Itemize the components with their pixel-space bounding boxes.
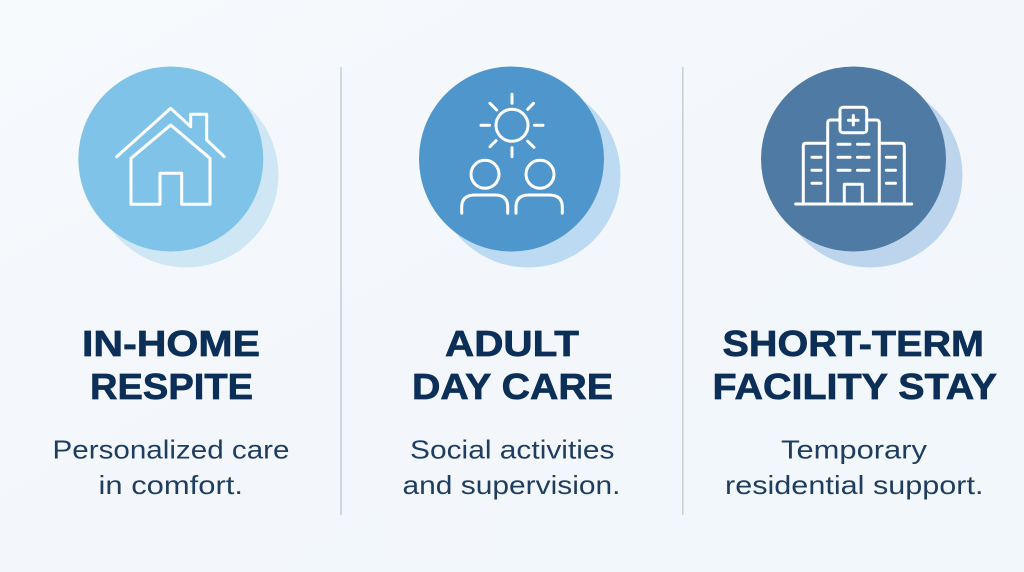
panel: in-home respite <box>52 66 290 500</box>
heading: adult day care: ADULT <box>445 323 579 364</box>
heading: short-term facility stay: SHORT-TERM <box>722 323 984 364</box>
icon: sun and two people in blue circle <box>419 66 620 268</box>
heading: short-term facility stay: FACILITY STAY <box>712 366 997 407</box>
text: adult day care description: Social activities <box>410 435 614 465</box>
heading: in-home respite: IN-HOME <box>82 323 260 364</box>
text: facility stay description: residential support. <box>725 470 984 500</box>
heading: in-home respite <box>82 323 260 407</box>
text: facility stay description <box>725 435 984 500</box>
panel: adult day care <box>402 66 620 500</box>
text: in-home description: in comfort. <box>98 470 243 500</box>
text: in-home description <box>52 435 290 500</box>
text: adult day care description: and supervision. <box>402 470 620 500</box>
heading: adult day care <box>412 323 613 407</box>
heading: in-home respite: RESPITE <box>90 366 253 407</box>
icon: hospital building in slate blue circle <box>761 66 962 268</box>
heading: short-term facility stay <box>712 323 997 407</box>
text: in-home description: Personalized care <box>52 435 290 465</box>
panel: short-term facility stay <box>712 66 997 500</box>
text: adult day care description <box>402 435 620 500</box>
text: facility stay description: Temporary <box>781 435 927 465</box>
icon: house in light blue circle <box>78 66 278 268</box>
heading: adult day care: DAY CARE <box>412 366 613 407</box>
